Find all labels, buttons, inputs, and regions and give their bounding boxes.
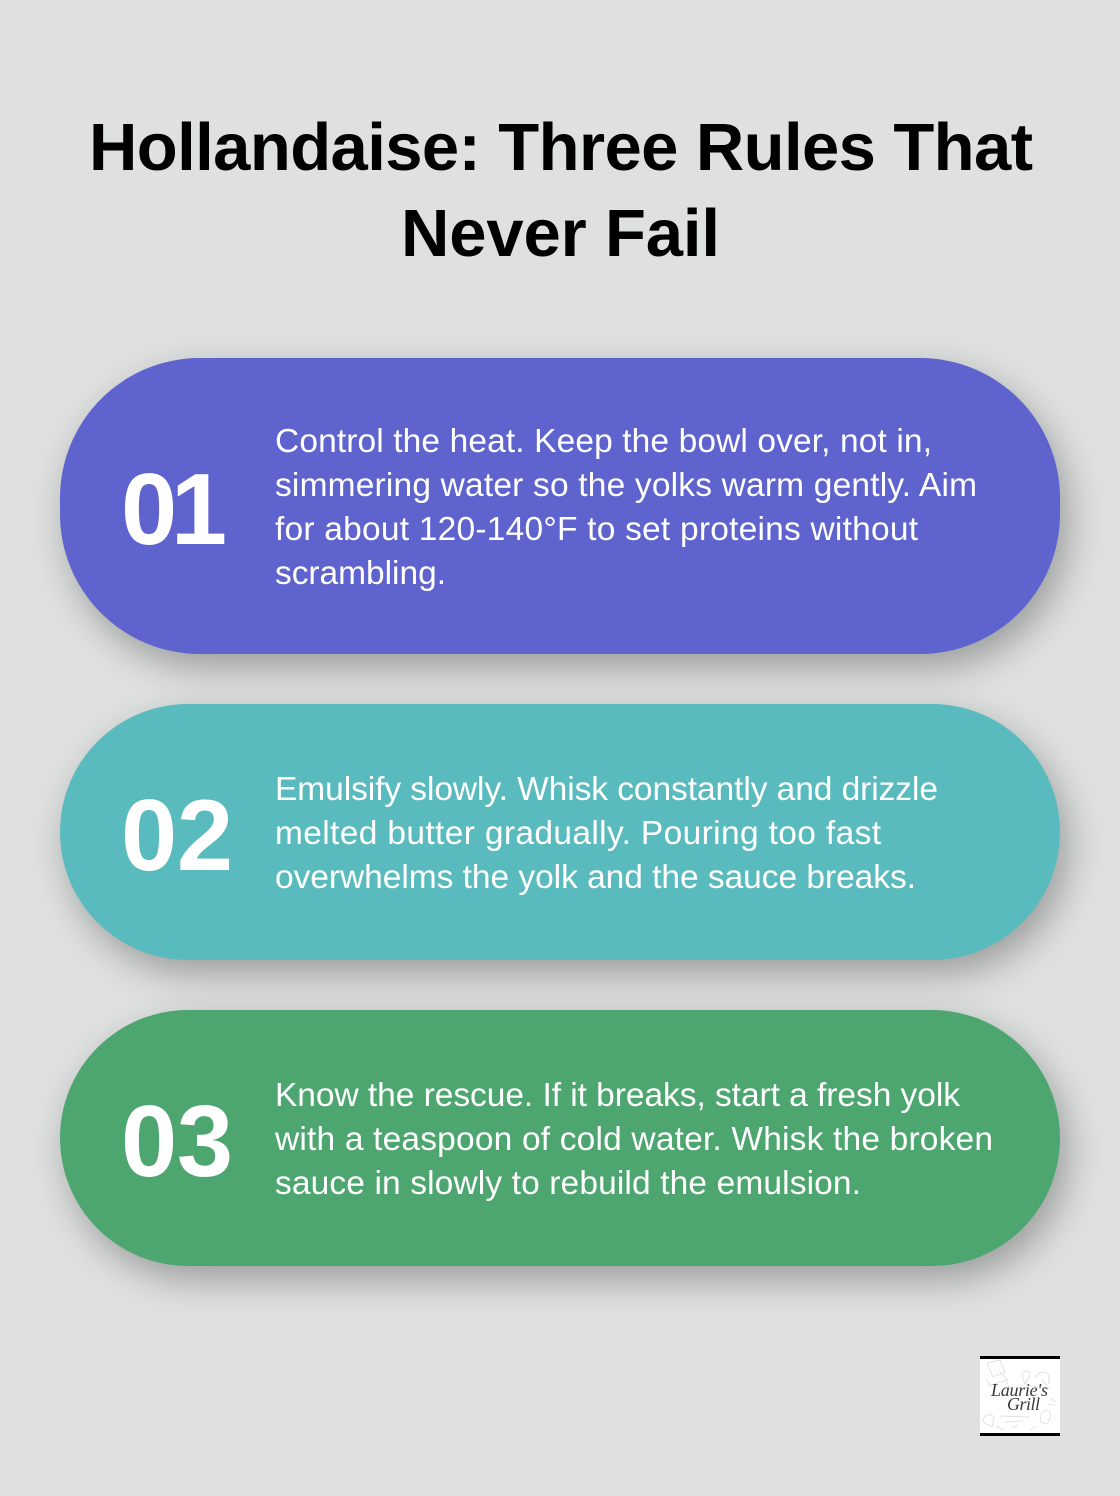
logo: Laurie's Grill: Grill — [1007, 1394, 1040, 1414]
panel: step 2 pill — [60, 704, 1060, 960]
step 3 text: sauce in slowly to rebuild the emulsion. — [275, 1165, 861, 1202]
step 2 text: melted butter gradually. Pouring too fast — [275, 815, 882, 852]
step 1 text: simmering water so the yolks warm gently. Aim — [275, 467, 977, 504]
logo: Laurie's Grill — [980, 1356, 1060, 1436]
step 3 text — [274, 1077, 993, 1202]
title: Hollandaise: Three Rules That — [89, 110, 1033, 185]
panel: step 1 pill — [60, 358, 1060, 654]
step 1 text: for about 120-140°F to set proteins without — [275, 511, 919, 548]
step 1 text — [275, 423, 977, 592]
panel: step 3 pill — [60, 1010, 1060, 1266]
step 3 text: with a teaspoon of cold water. Whisk the broken — [274, 1121, 993, 1158]
step 1 number: 01 — [121, 454, 227, 566]
step 2 number: 02 — [121, 780, 233, 892]
step 1 text: Control the heat. Keep the bowl over, not in, — [275, 423, 932, 460]
logo: Laurie's Grill: Laurie's — [990, 1380, 1048, 1400]
title: Never Fail — [401, 196, 720, 271]
step 2 text: overwhelms the yolk and the sauce breaks. — [275, 859, 916, 896]
step 1 text: scrambling. — [275, 555, 446, 592]
step 3 text: Know the rescue. If it breaks, start a fresh yolk — [275, 1077, 960, 1114]
step 3 number: 03 — [121, 1086, 233, 1198]
title — [89, 110, 1033, 271]
step 2 text — [275, 771, 938, 896]
step 2 text: Emulsify slowly. Whisk constantly and drizzle — [275, 771, 938, 808]
